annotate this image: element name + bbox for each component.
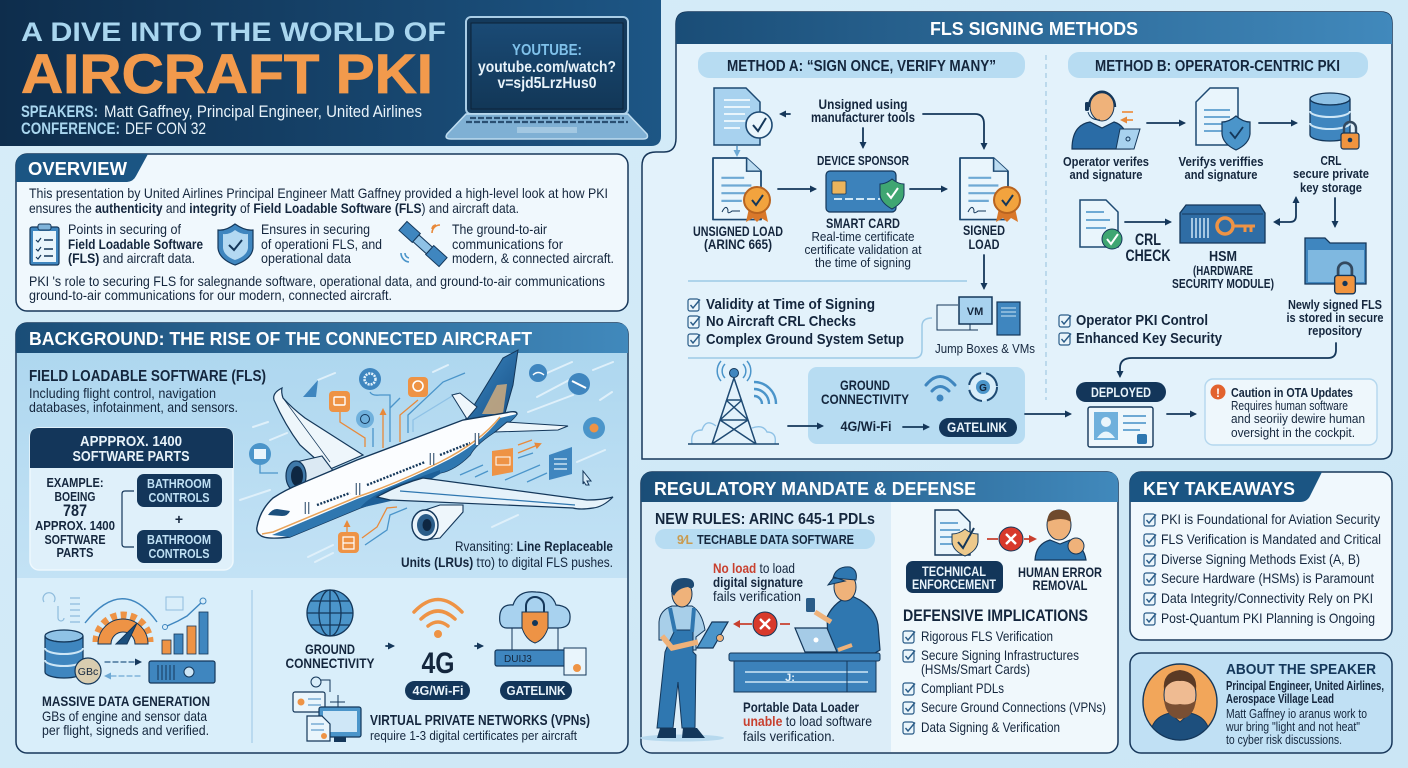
CRL storage caption: secure private	[1293, 166, 1369, 181]
icon: orange chip	[329, 391, 350, 412]
method A pill: METHOD A: “SIGN ONCE, VERIFY MANY”	[727, 58, 996, 75]
icon: database badge	[249, 443, 271, 465]
defensive implications list: Secure Signing Infrastructures	[921, 647, 1079, 663]
pill: gatelink	[939, 418, 1017, 437]
defensive implications list	[903, 628, 1106, 735]
speakers: SPEAKERS:	[21, 102, 98, 121]
icons around airplane	[249, 364, 605, 553]
laptop with YouTube link: youtube.com/watch?	[478, 59, 616, 76]
near engine	[412, 505, 463, 540]
point two text: operational data	[261, 250, 351, 266]
head	[834, 573, 856, 601]
example label: APPROX. 1400	[35, 518, 115, 533]
pill: gatelink: GATELINK	[947, 420, 1007, 435]
pill: technical enforcement: ENFORCEMENT	[912, 576, 996, 592]
CRL check label: CRL	[1135, 230, 1161, 249]
panel: key takeaways	[1130, 472, 1392, 640]
icon: wifi badge	[529, 364, 547, 382]
signature failure text	[713, 560, 803, 604]
smart card label	[804, 215, 922, 270]
illustration: engineer at laptop	[795, 567, 880, 653]
HSM label: (HARDWARE	[1193, 264, 1253, 278]
method B checklist: Operator PKI Control	[1076, 312, 1208, 329]
signature failure text: fails verification	[713, 588, 801, 604]
signature failure text: digital signature	[713, 574, 803, 590]
point two text: of operationi FLS, and	[261, 236, 382, 252]
pill: gatelink: GATELINK	[506, 683, 566, 698]
laptop with YouTube link	[446, 17, 648, 139]
icon: plane badge	[568, 373, 590, 395]
speaker role	[1226, 679, 1384, 706]
laptop with YouTube link: v=sjd5LrzHus0	[498, 75, 597, 92]
CRL storage caption	[1293, 153, 1369, 195]
connection lines from aircraft to icons	[260, 373, 547, 545]
portable data loader text: Portable Data Loader	[743, 699, 859, 715]
HSM label: HSM	[1209, 248, 1237, 265]
portable data loader text	[743, 699, 872, 744]
ground connectivity box: CONNECTIVITY	[821, 391, 910, 407]
icon: radio tower	[688, 361, 779, 444]
LRU caption: Units (LRUs) tτο) to digital FLS pushes.	[401, 554, 613, 570]
icon: clipboard	[30, 224, 59, 265]
icon: ID card	[1088, 407, 1153, 447]
icon: blue list	[549, 447, 572, 480]
signed load label: LOAD	[968, 236, 1000, 252]
conference: DEF CON 32	[125, 119, 206, 138]
repository caption: Newly signed FLS	[1288, 297, 1382, 312]
speaker bio: Matt Gaffney io aranus work to	[1226, 706, 1367, 721]
VPN text: require 1-3 digital certificates per aircraft	[370, 728, 577, 743]
vertical tail fin	[465, 350, 518, 420]
portable data loader text: fails verification.	[743, 728, 835, 744]
signature failure text: No load to load	[713, 560, 795, 576]
ground connectivity label	[286, 641, 375, 671]
icon: satellite badge	[583, 417, 605, 439]
speaker avatar	[1143, 664, 1217, 740]
icon: blue nav	[356, 410, 374, 428]
CRL storage caption: key storage	[1300, 180, 1362, 195]
smart card label: Real-time certificate	[812, 229, 914, 244]
panel: FLS signing methods	[642, 12, 1392, 459]
pill: bathroom controls	[137, 474, 222, 507]
point one text: Points in securing of	[68, 221, 181, 237]
icon: G cycle	[969, 373, 997, 401]
pill: deployed: DEPLOYED	[1091, 384, 1151, 400]
takeaways list: PKI is Foundational for Aviation Security	[1161, 511, 1380, 527]
point three text: modern, & connected aircraft.	[452, 250, 614, 266]
point two text	[261, 221, 382, 266]
icon: small plane	[303, 380, 318, 397]
signed load label	[963, 222, 1005, 252]
method B checklist	[1059, 312, 1223, 347]
panel: regulatory mandate and defense	[640, 472, 1118, 753]
icon: shield	[218, 224, 253, 265]
arrow	[983, 255, 985, 288]
example label: 787	[63, 501, 87, 520]
FLS description: databases, infotainment, and sensors.	[29, 399, 238, 415]
speakers: Matt Gaffney, Principal Engineer, United Airlines	[104, 102, 422, 121]
portable data loader text: unable to load software	[743, 713, 872, 729]
tablet	[697, 622, 728, 648]
icon: signed load document	[960, 158, 1020, 222]
icon: cloud lock server: DUIJ3	[504, 654, 532, 665]
takeaways list	[1144, 511, 1381, 626]
FLS description	[29, 385, 238, 415]
software parts box: APPPROX. 1400	[80, 433, 182, 450]
icon: smart card	[826, 171, 904, 212]
icon: wifi	[926, 376, 955, 400]
new rules heading: NEW RULES: ARINC 645-1 PDLs	[655, 511, 875, 528]
arrow	[923, 114, 984, 148]
4G label: 4G	[422, 647, 454, 680]
point three text: The ground-to-air	[452, 221, 547, 237]
VPN text	[370, 713, 590, 743]
panel: overview	[16, 154, 628, 311]
point two text: Ensures in securing	[261, 221, 370, 237]
pill: techable data	[655, 529, 875, 549]
far stabilizer	[452, 393, 477, 419]
unsigned load label: UNSIGNED LOAD	[693, 223, 783, 239]
icon: locked folder	[1305, 238, 1366, 294]
fuselage	[257, 412, 517, 538]
caution callout: Caution in OTA Updates	[1231, 385, 1353, 400]
pill: techable data: TECHABLE DATA SOFTWARE	[697, 532, 854, 547]
title line two: AIRCRAFT PKI	[21, 42, 433, 105]
caution callout: !	[1216, 386, 1220, 400]
FLS description: Including flight control, navigation	[29, 385, 216, 401]
smart card label: SMART CARD	[826, 215, 900, 231]
pill: technical enforcement: TECHNICAL	[922, 563, 986, 579]
unsigned tools label: manufacturer tools	[811, 110, 915, 125]
illustration: loader table: J:	[785, 672, 795, 684]
defensive implications list: Rigorous FLS Verification	[921, 628, 1053, 644]
intro text: This presentation by United Airlines Principal Engineer Matt Gaffney provided a high-level look at how PKI	[29, 185, 608, 201]
caution callout: and seoriiy dewire human	[1231, 411, 1365, 426]
point three text	[452, 221, 614, 266]
ground connectivity box: 4G/Wi-Fi	[840, 419, 892, 434]
CRL check label	[1126, 230, 1171, 265]
ground connectivity box: GROUND	[840, 377, 890, 393]
laptop with YouTube link: YOUTUBE:	[512, 42, 582, 59]
GB badge: GBc	[78, 666, 98, 678]
unsigned tools label	[811, 97, 915, 125]
unsigned tools label: Unsigned using	[818, 97, 908, 112]
icon: orange module	[338, 532, 359, 553]
example label: BOEING	[54, 489, 96, 504]
icon: jump boxes and VMs	[937, 297, 1020, 335]
pill: bathroom controls: BATHROOM	[147, 477, 211, 491]
icon: red X between	[987, 527, 1037, 551]
intro text	[29, 185, 608, 216]
conference: CONFERENCE:	[21, 119, 120, 138]
icon: red X with arrow	[733, 612, 790, 636]
shoes	[657, 728, 705, 738]
near wing	[377, 478, 613, 509]
far wing	[274, 388, 363, 470]
icon: gear circle	[359, 368, 381, 390]
defensive implications list: Secure Ground Connections (VPNs)	[921, 699, 1106, 715]
icon: cursor	[583, 471, 591, 485]
speaker bio	[1225, 706, 1367, 747]
CRL check label: CHECK	[1126, 246, 1171, 265]
speaker bio: to cyber risk discussions.	[1226, 732, 1342, 747]
icon group: massive data	[43, 593, 215, 684]
point one text: (FLS) and aircraft data.	[68, 250, 195, 266]
CRL storage caption: CRL	[1320, 153, 1342, 168]
FLS heading: FLS SIGNING METHODS	[930, 19, 1138, 39]
bar chart	[162, 612, 208, 654]
massive data text: per flight, signeds and verified.	[42, 722, 209, 738]
device sponsor: DEVICE SPONSOR	[817, 153, 909, 168]
example label	[35, 475, 115, 560]
regulatory heading: REGULATORY MANDATE & DEFENSE	[654, 479, 976, 499]
verifies caption: and signature	[1184, 167, 1258, 182]
defensive implications heading: DEFENSIVE IMPLICATIONS	[903, 606, 1088, 625]
windows	[317, 443, 470, 505]
icon: document with shield	[1196, 88, 1250, 150]
laptop	[795, 628, 837, 652]
pill: bathroom controls second: CONTROLS	[148, 547, 210, 561]
point one text	[68, 221, 203, 266]
massive data text: MASSIVE DATA GENERATION	[42, 693, 210, 709]
defensive implications list: Data Signing & Verification	[921, 719, 1060, 735]
HSM label	[1172, 248, 1274, 291]
arm	[662, 636, 698, 648]
method A checklist: No Aircraft CRL Checks	[706, 313, 856, 330]
shirt	[827, 596, 880, 653]
defensive implications list: Compliant PDLs	[921, 680, 1004, 696]
illustration: loader table	[729, 653, 880, 692]
pill: bathroom controls: CONTROLS	[148, 491, 210, 505]
arrow double headed	[1273, 198, 1296, 226]
arrow	[1259, 122, 1296, 124]
icon: human error person	[1035, 510, 1086, 560]
panel: background connected aircraft	[16, 323, 628, 753]
illustration: technician with tablet	[640, 578, 728, 742]
speaker bio: wur bring "light and not heat"	[1225, 719, 1360, 734]
near wing fairing	[360, 470, 440, 508]
jump boxes label: Jump Boxes & VMs	[935, 341, 1035, 356]
takeaways list: FLS Verification is Mandated and Critical	[1161, 531, 1381, 547]
closing text: ground-to-air communications for our modern, connected aircraft.	[29, 287, 392, 303]
human error label	[1018, 564, 1102, 593]
takeaways list: Diverse Signing Methods Exist (A, B)	[1161, 551, 1360, 567]
arrow	[1025, 413, 1070, 415]
gauge gear	[85, 599, 157, 644]
method B pill: METHOD B: OPERATOR-CENTRIC PKI	[1095, 58, 1340, 75]
LRU caption	[401, 538, 613, 570]
operator caption: and signature	[1070, 167, 1142, 182]
method A pill	[698, 52, 1025, 78]
defensive implications list: (HSMs/Smart Cards)	[921, 661, 1030, 677]
icon: cloud lock server	[495, 592, 586, 675]
VPN text: VIRTUAL PRIVATE NETWORKS (VPNs)	[370, 713, 590, 729]
icon: unsigned document with check	[714, 88, 772, 145]
ground connectivity label: GROUND	[305, 641, 355, 657]
massive data text: GBs of engine and sensor data	[42, 708, 207, 724]
icon: G cycle: G	[979, 383, 987, 394]
unsigned load label	[693, 223, 783, 252]
example label: PARTS	[56, 545, 94, 560]
repository caption	[1286, 297, 1384, 338]
ground connectivity label: CONNECTIVITY	[286, 655, 375, 671]
arrow	[386, 645, 393, 647]
human error label: REMOVAL	[1032, 577, 1088, 593]
massive data text	[42, 693, 210, 738]
point three text: communications for	[452, 236, 563, 252]
pill: technical enforcement	[906, 561, 1003, 593]
plus sign: +	[175, 511, 183, 527]
closing text: PKI 's role to securing FLS for salegnande software, operational data, and ground-to-air communications	[29, 273, 605, 289]
header banner	[0, 0, 661, 146]
icon: wifi	[414, 600, 462, 637]
arrow	[778, 188, 815, 190]
pill: bathroom controls second	[137, 530, 222, 563]
pill: techable data: 9⁄L	[677, 533, 693, 547]
method A checklist: Complex Ground System Setup	[706, 331, 904, 348]
raised arm	[815, 612, 831, 622]
takeaways heading: KEY TAKEAWAYS	[1143, 479, 1295, 499]
HSM label: SECURITY MODULE)	[1172, 277, 1274, 291]
icon: orange sensor	[408, 377, 428, 397]
signed load label: SIGNED	[963, 222, 1005, 238]
arrow	[1147, 122, 1184, 124]
pill: deployed	[1076, 382, 1166, 402]
overview heading: OVERVIEW	[28, 159, 127, 179]
operator caption: Operator verifes	[1063, 154, 1149, 169]
method A checklist: Validity at Time of Signing	[706, 296, 875, 313]
arrow	[788, 425, 822, 427]
takeaways list: Post-Quantum PKI Planning is Ongoing	[1161, 610, 1375, 626]
example label: EXAMPLE:	[46, 475, 104, 490]
human error label: HUMAN ERROR	[1018, 564, 1102, 580]
repository caption: is stored in secure	[1286, 310, 1384, 325]
background heading: BACKGROUND: THE RISE OF THE CONNECTED AIRCRAFT	[29, 329, 532, 349]
smart card label: certificate validation at	[804, 242, 922, 257]
operator caption	[1063, 154, 1149, 182]
icon: enforcement document	[935, 510, 978, 556]
illustration: airplane	[257, 350, 613, 540]
LRU caption: Rvansiting: Line Replaceable	[455, 538, 613, 554]
caution callout: Requires human software	[1231, 398, 1348, 413]
arrow	[862, 128, 864, 147]
data flow arrows	[105, 661, 140, 663]
icon: satellite	[399, 221, 447, 267]
shirt	[659, 606, 705, 650]
caution callout	[1205, 379, 1377, 445]
far engine	[286, 456, 334, 491]
head	[672, 581, 692, 607]
point one text: Field Loadable Software	[68, 236, 203, 252]
overalls	[657, 630, 696, 728]
speaker role: Aerospace Village Lead	[1226, 692, 1334, 706]
takeaways list: Data Integrity/Connectivity Rely on PKI	[1161, 590, 1373, 606]
FLS heading: FIELD LOADABLE SOFTWARE (FLS)	[29, 368, 266, 385]
icon: globe	[307, 590, 353, 636]
takeaways list: Secure Hardware (HSMs) is Paramount	[1161, 570, 1374, 586]
pill: 4G/Wi-Fi	[405, 681, 470, 700]
belly stripe	[272, 414, 517, 537]
method B pill	[1068, 52, 1368, 78]
caution callout: oversight in the cockpit.	[1231, 425, 1355, 440]
server unit	[149, 661, 215, 683]
software parts box: SOFTWARE PARTS	[72, 448, 190, 465]
GB badge	[75, 658, 101, 684]
about heading: ABOUT THE SPEAKER	[1226, 661, 1376, 678]
icon: locked database	[1310, 93, 1359, 149]
arrow	[910, 188, 946, 190]
smart card label: the time of signing	[815, 255, 911, 270]
arrow	[1120, 343, 1336, 376]
icon: jump boxes and VMs: VM	[967, 306, 983, 318]
icon: HSM with key	[1180, 205, 1265, 243]
speed lines decoration around aircraft	[240, 362, 613, 562]
rear stabilizer	[495, 422, 568, 432]
icon: CRL document	[1080, 200, 1122, 249]
database stack	[45, 630, 83, 678]
software parts box	[30, 428, 233, 570]
method A checklist	[688, 296, 904, 348]
pill: bathroom controls second: BATHROOM	[147, 533, 211, 547]
icon: unsigned load document	[713, 158, 770, 222]
closing text	[29, 273, 605, 303]
repository caption: repository	[1308, 323, 1363, 338]
arrow	[475, 645, 482, 647]
arrow	[1334, 198, 1336, 226]
icon: operator with laptop	[1072, 91, 1140, 149]
ground connectivity box	[808, 367, 1025, 444]
verifies caption: Verifys veriffies	[1178, 154, 1264, 169]
method B checklist: Enhanced Key Security	[1076, 330, 1223, 347]
arrow	[736, 146, 738, 155]
example label: SOFTWARE	[44, 532, 106, 547]
title line one: A DIVE INTO THE WORLD OF	[21, 17, 446, 47]
verifies caption	[1178, 154, 1264, 182]
icon: orange data	[492, 448, 513, 476]
intro text: ensures the authenticity and integrity of Field Loadable Software (FLS) and aircraft data.	[29, 200, 519, 216]
arrow	[781, 113, 790, 115]
icon: VPN devices	[293, 677, 361, 742]
conference	[21, 119, 206, 138]
panel: about the speaker	[1130, 653, 1392, 753]
arrow	[1125, 221, 1170, 223]
unsigned load label: (ARINC 665)	[704, 236, 772, 252]
pill: 4G/Wi-Fi: 4G/Wi-Fi	[412, 683, 464, 698]
arrow	[1167, 413, 1195, 415]
